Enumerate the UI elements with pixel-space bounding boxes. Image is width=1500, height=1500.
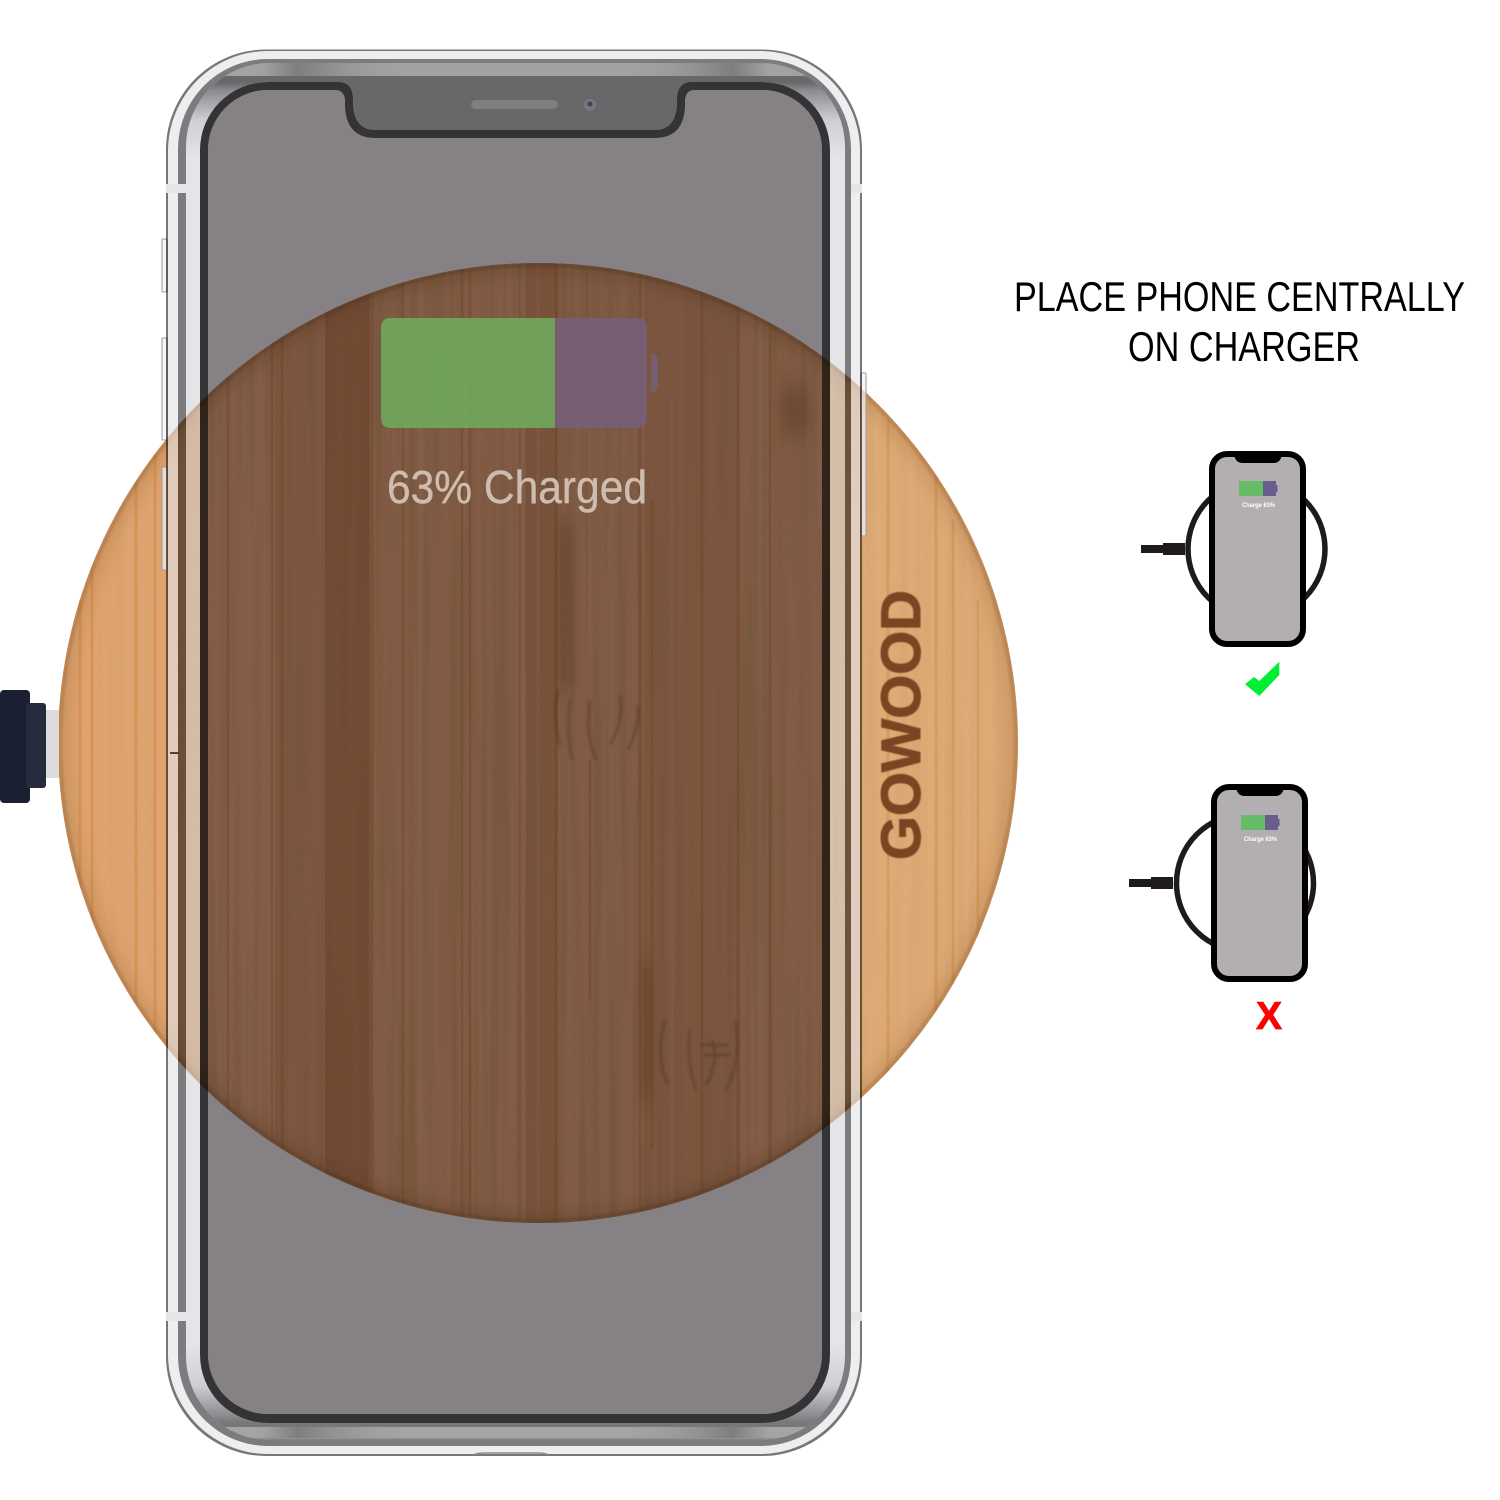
cable — [1129, 877, 1173, 889]
notch — [338, 76, 692, 130]
speaker — [471, 100, 558, 109]
antenna band highlights — [166, 184, 862, 1321]
instruction heading: ON CHARGER — [1128, 323, 1360, 370]
brand name on charger: GOWOOD — [869, 590, 932, 860]
correct placement icon — [1141, 454, 1325, 644]
wireless charger: bamboo disc — [58, 263, 1020, 1223]
side buttons — [162, 239, 866, 570]
instruction heading — [1014, 273, 1465, 370]
bottom port line — [473, 1453, 549, 1455]
phone screen — [208, 90, 822, 1414]
small battery — [1241, 815, 1280, 830]
charger ring — [1176, 814, 1314, 952]
cable — [1141, 543, 1185, 555]
small charge label: Charge 63% — [1242, 502, 1275, 509]
large phone outline — [162, 50, 866, 1456]
top and bottom band shading — [262, 63, 768, 1438]
charge status text: 63% Charged — [387, 461, 647, 513]
camera — [584, 99, 596, 111]
green check mark — [1245, 662, 1279, 696]
notch — [1234, 454, 1282, 463]
battery charged portion — [381, 318, 555, 428]
notch — [1236, 787, 1284, 796]
battery terminal — [651, 354, 658, 392]
cable plug — [0, 690, 59, 803]
small charge label: Charge 63% — [1244, 836, 1277, 843]
battery empty portion — [555, 318, 647, 428]
silver frame rings — [168, 51, 860, 1454]
small phone — [1212, 454, 1303, 644]
dark frame layers — [166, 50, 862, 1456]
red x mark: X — [1256, 995, 1282, 1038]
incorrect placement icon — [1129, 787, 1314, 979]
battery indicator — [381, 318, 658, 428]
small phone — [1214, 787, 1305, 979]
small battery — [1239, 481, 1278, 496]
charger ring — [1188, 480, 1325, 618]
